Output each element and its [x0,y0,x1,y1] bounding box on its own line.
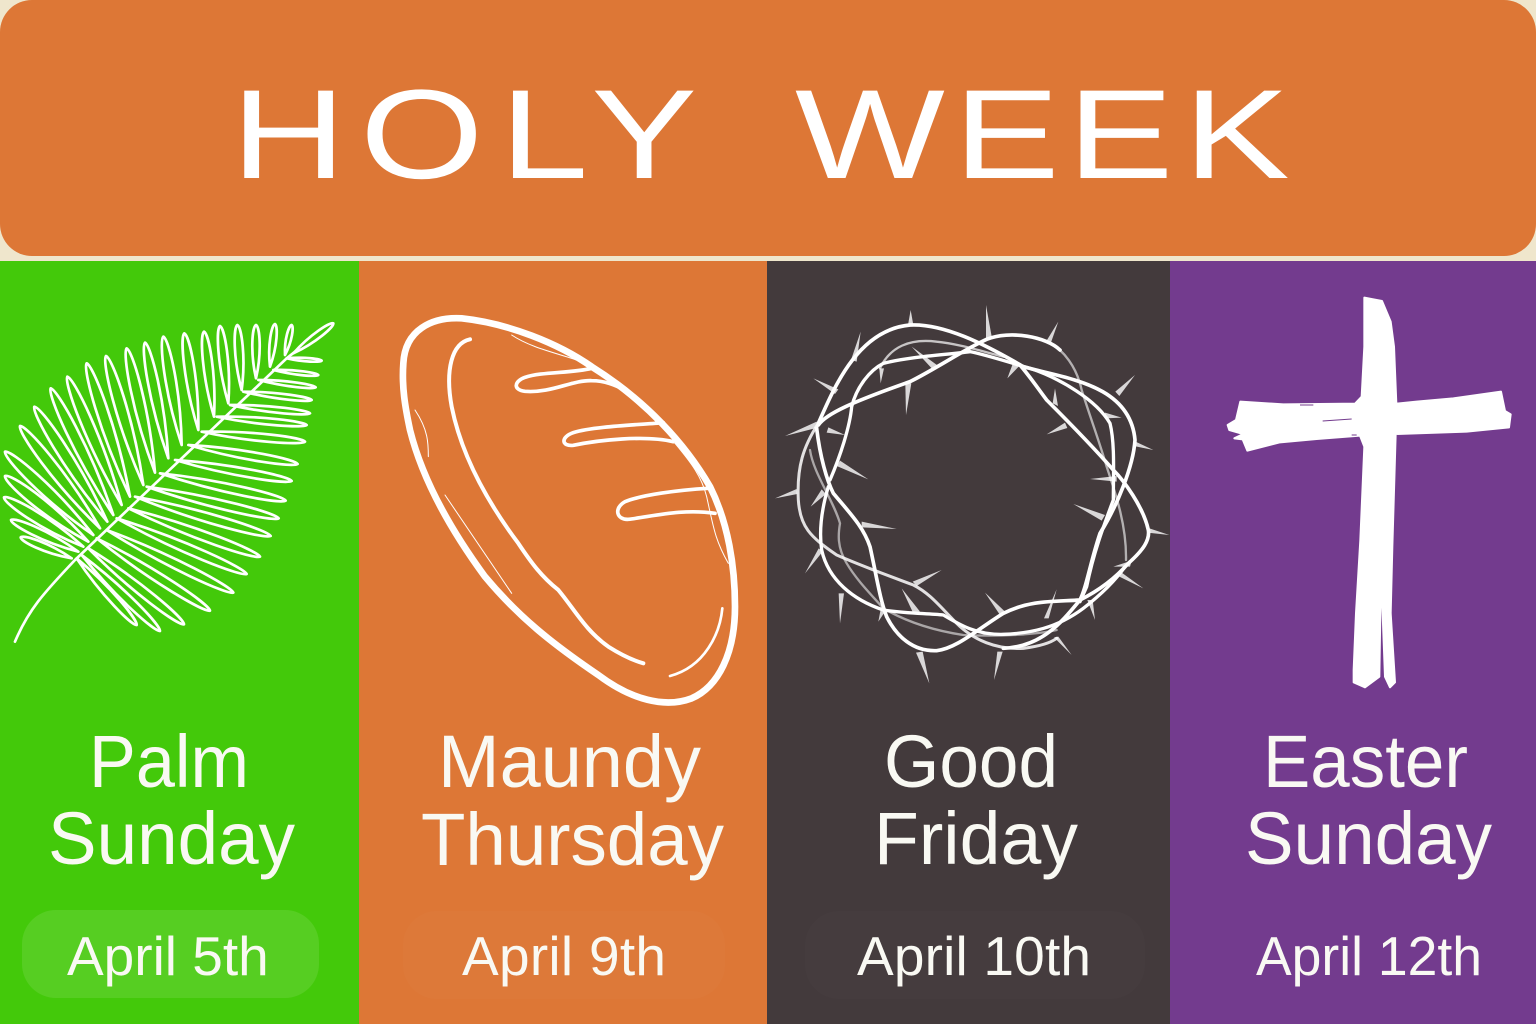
heading: Palm Sunday: Palm [89,720,249,803]
icon: crown of thorns [775,305,1169,683]
date pill: April 9th [403,911,725,999]
date label: April 12th: April 12th [1256,925,1482,987]
heading: Easter Sunday [1245,720,1492,880]
heading: Maundy Thursday [421,720,724,881]
thorns [775,305,1169,683]
heading: Maundy Thursday: Maundy [438,720,701,803]
strands [798,325,1149,651]
heading: Good Friday: Good [884,720,1058,803]
date pill: April 5th [22,910,319,998]
date pill: April 5th: April 5th [67,925,269,987]
panel: Good Friday [767,261,1170,1024]
heading: Easter Sunday: Sunday [1245,797,1492,880]
date pill: April 10th: April 10th [857,925,1091,987]
panel: Maundy Thursday [359,261,767,1024]
heading: Palm Sunday: Sunday [48,797,295,880]
heading: Palm Sunday [48,720,295,880]
header banner [0,0,1536,256]
panel: Easter Sunday [1170,261,1536,1024]
panel: Palm Sunday [0,261,360,1024]
date pill: April 10th [805,911,1145,999]
title: HOLY WEEK [231,64,1290,205]
icon: cross [1228,298,1511,687]
date pill: April 9th: April 9th [462,925,666,987]
heading: Good Friday [874,720,1078,880]
heading: Easter Sunday: Easter [1263,720,1468,803]
icon: palm branch [1,321,335,642]
heading: Good Friday: Friday [874,797,1078,880]
icon: loaf of bread [403,318,735,702]
heading: Maundy Thursday: Thursday [421,798,724,881]
